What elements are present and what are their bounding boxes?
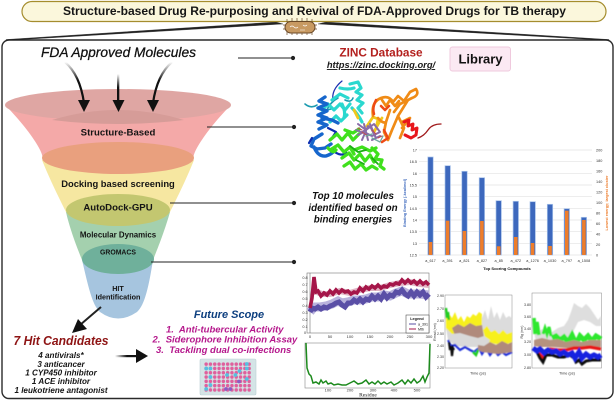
left axis ticks: 15.5 [410,184,417,188]
pointer lines with dots [151,56,296,264]
x axis labels: a_617 [425,259,436,263]
title banner [22,2,606,22]
left axis ticks [410,148,417,258]
tick labels [437,294,444,370]
ZINC URL: https://zinc.docking.org/ [327,59,437,70]
list: hit candidates: 1 leukotriene antagonist [14,386,108,395]
orange bars [429,211,586,255]
arrow: left [65,62,84,103]
label: GROMACS: GROMACS [100,250,136,256]
y axis ticks [302,276,308,335]
series: green [446,308,449,320]
bar chart: binding energies: Lowest energy; largest cluster [605,175,609,230]
series: brown right [478,341,512,354]
series: green [534,318,539,335]
x axis labels: a_85 [494,259,503,263]
tick labels: 2.50 [437,332,444,336]
tick labels: 200 [347,388,354,392]
tick labels: 300 [370,388,377,392]
right axis ticks [596,148,602,258]
arrow: middle [117,74,119,104]
y axis ticks: 0.6 [302,290,308,294]
y axis ticks: 0.5 [302,297,308,301]
series: black [537,352,601,364]
icon: well plate [200,359,256,395]
x axis labels: a_1030 [544,259,556,263]
axis labels: Time (ps) [470,372,487,376]
x axis labels: a_797 [562,259,572,263]
left axis ticks: 16 [413,172,417,176]
list: future scope: 3. Tackling dual co-infections [156,345,291,356]
funnel [5,89,231,318]
icon: TB bacterium [283,18,317,35]
chart: time series left: Rmsd (nm) [433,323,437,341]
right axis ticks: 40 [596,232,600,236]
y axis ticks: 0.4 [302,304,308,308]
left axis ticks: 16.5 [410,160,417,164]
funnel: HIT cup [82,260,153,318]
arrows into funnel [65,62,172,112]
series: blue [533,348,601,358]
tick labels: 3.00 [524,353,531,357]
series: Mtb red halo [317,282,429,294]
funnel: orange disc [42,142,194,174]
heading: 7 Hit Candidates: 7 Hit Candidates [14,334,109,348]
x axis labels: a_827 [477,259,487,263]
right axis ticks: 20 [596,243,600,247]
tick labels: 3.60 [524,315,531,319]
series: a_391 purple [310,290,429,312]
list: hit candidates: 4 antivirals* [37,351,85,360]
left axis ticks: 13.5 [410,230,417,234]
tick labels: 250 [407,334,414,339]
right axis ticks: 100 [596,201,602,205]
left axis ticks: 14.5 [410,207,417,211]
tick labels: 2.40 [437,344,444,348]
tick labels: 500 [414,388,421,392]
Library box: Library [458,52,503,66]
chart: RMSF residue plot [305,343,430,398]
funnel: structure-based segment [5,105,231,158]
tick labels: 100 [347,334,354,339]
blue bars [428,157,587,255]
list: future scope: 2. Siderophore Inhibition Assay [152,334,298,346]
right axis ticks: 160 [596,170,602,174]
tick labels: 3.20 [524,340,531,344]
tick labels [524,303,531,370]
y axis ticks: 0.7 [302,283,308,287]
tick labels: 3.40 [524,327,531,331]
tick labels: 2.30 [437,355,444,359]
right axis ticks: 180 [596,159,602,163]
right axis ticks: 60 [596,222,600,226]
left axis ticks: 17 [413,148,417,152]
gridlines [419,150,592,255]
list: hit candidates: 1 ACE inhibitor [32,377,91,386]
tick labels: 2.20 [437,366,444,370]
title banner: Structure-based Drug Re-purposing and Revival of FDA-Approved Drugs for TB therapy [63,4,566,18]
series: yellow right [483,326,512,345]
tick labels: 2.70 [437,307,444,311]
left axis ticks: 14 [413,218,417,222]
tick labels: 400 [391,388,398,392]
axis titles: Top Scoring Compounds [483,266,532,271]
series: brown left [452,323,484,340]
series: Mtb red [310,277,429,308]
chart legend: a_391 [418,322,428,326]
series: grey upper [478,306,512,346]
label: HIT Identification: HIT [112,284,124,293]
tick labels: 100 [325,388,332,392]
funnel: molecular dynamics segment [66,212,170,260]
y axis ticks: 0 [304,331,306,335]
label: HIT Identification: Identification [96,292,140,302]
tick labels: 2.90 [437,294,444,298]
y axis ticks: 0.8 [302,276,308,280]
funnel: AutoDock disc [66,194,170,226]
ZINC Database heading: ZINC Database [339,46,423,60]
series: grey lower [446,328,490,348]
tick labels: 300 [426,334,433,339]
tick labels: 0 [309,334,312,339]
tick labels: 150 [367,334,374,339]
bar chart: binding energies [403,148,609,271]
x axis labels: a_1508 [578,259,590,263]
y axis ticks: 0.3 [302,311,308,315]
chart: time series right: Rg (nm) [520,326,524,338]
funnel: top opening [5,89,231,121]
arrow: funnel to hit candidates [72,307,101,333]
caption: top 10 molecules: binding energies [314,214,393,226]
series: yellow left [446,312,482,338]
right axis ticks: 0 [596,254,598,258]
funnel: inner rim shade [52,110,184,124]
funnel: GROMACS disc [82,244,154,274]
series: red [538,347,601,359]
list: hit candidates: 3 anticancer [37,360,85,369]
left axis ticks: 15 [413,195,417,199]
label: Structure-Based: Structure-Based [81,128,155,138]
y axis ticks: 0.2 [302,318,308,322]
tick labels [325,388,421,392]
label: Docking based screening: Docking based screening [61,178,175,189]
funnel labels [61,128,175,302]
list: future scope: 1. Anti-tubercular Activity [166,324,284,336]
x axis labels: a_391 [442,259,453,263]
chart: time series right [520,293,602,376]
chart: time series left [433,294,512,376]
chart legend: Mtb [418,328,424,332]
caption: top 10 molecules: identified based on [308,203,398,214]
funnel: docking segment [42,160,194,212]
connector lines from title to panel [6,22,609,40]
tick labels: 3.80 [524,303,531,307]
y axis ticks: 0.1 [302,325,308,329]
label: Molecular Dynamics: Molecular Dynamics [80,230,157,240]
x axis labels [425,259,590,263]
left axis ticks: 12.5 [410,254,417,258]
list: hit candidates: 1 CYP450 inhibitor [25,368,98,378]
series: black [449,342,454,356]
tick labels: 2.60 [437,319,444,323]
series: brown [534,338,601,348]
series: grey [533,303,601,344]
arrow: candidates to future scope [115,349,148,363]
chart legend: Legend [410,317,424,321]
heading: Future Scope: Future Scope [194,309,264,321]
chart legend [406,315,429,333]
right axis ticks: 80 [596,212,600,216]
heading: FDA Approved Molecules: FDA Approved Molecules [41,45,196,60]
x axis title: Residue [359,392,377,398]
series: a_391 purple halo [310,291,429,312]
protein structure [305,81,441,170]
right axis ticks: 200 [596,148,602,152]
x axis labels: a_472 [511,259,521,263]
x axis labels: a_1276 [526,259,539,263]
axis labels: Time (ps) [559,372,576,376]
x axis labels: a_821 [459,259,470,263]
arrow: right [153,62,172,103]
tick labels: 50 [328,334,333,339]
arrowheads [78,100,159,112]
label: AutoDock-GPU: AutoDock-GPU [83,202,153,214]
tick labels [309,334,433,339]
series: blue [448,340,512,355]
bar chart: binding energies: Binding Energy [-kcal/mol] [403,178,407,227]
right axis ticks: 120 [596,190,602,194]
Library box [450,47,510,71]
right axis ticks: 140 [596,180,602,184]
tick labels: 2.80 [524,366,531,370]
left axis ticks: 13 [413,242,417,246]
tick labels: 200 [387,334,394,339]
caption: top 10 molecules: Top 10 molecules [312,191,394,202]
chart: RMSD lines [302,273,433,339]
